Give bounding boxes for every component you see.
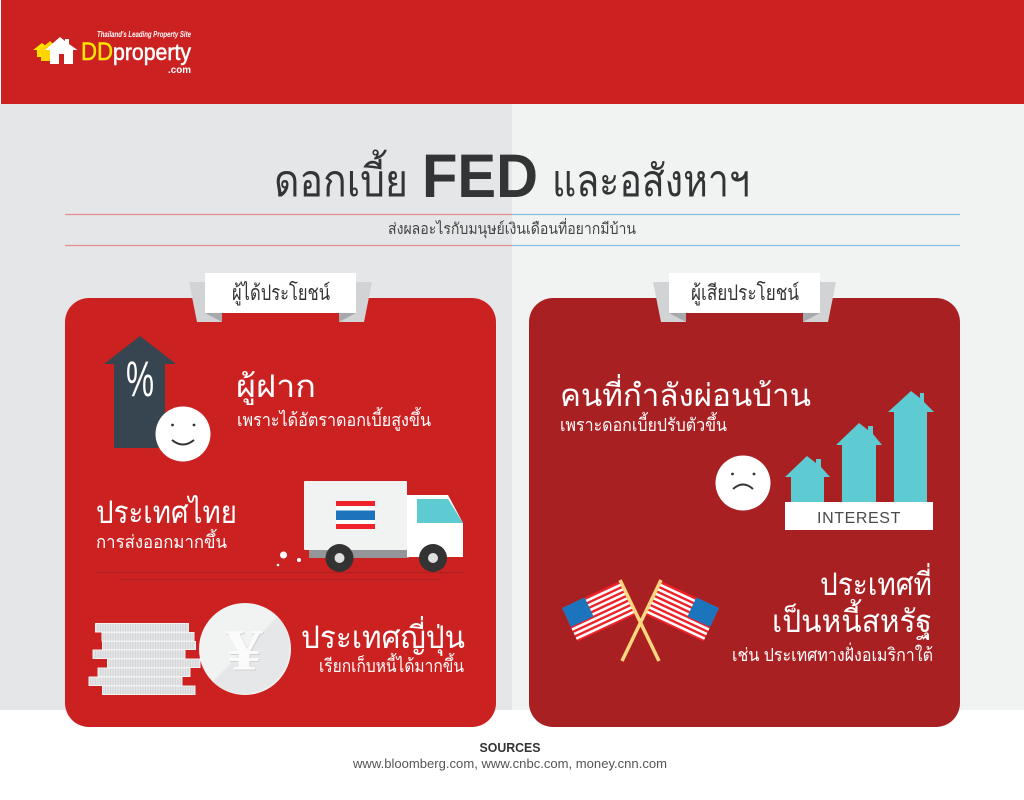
- panel: beneficiaries: [65, 273, 496, 727]
- sources: www.bloomberg.com, www.cnbc.com, money.cnn.com: [352, 756, 667, 771]
- flag: left: [562, 581, 636, 642]
- text: mortgage payers: เพราะดอกเบี้ยปรับตัวขึ้น: [560, 412, 727, 435]
- text: US debt holder countries: เป็นหนี้สหรัฐ: [772, 599, 932, 640]
- text: Japan: เรียกเก็บหนี้ได้มากขึ้น: [319, 653, 464, 676]
- text: US debt holder countries: เช่น ประเทศทางฝั่งอเมริกาใต้: [732, 642, 933, 665]
- icon: coin stack: [89, 624, 200, 694]
- icon: percent up arrow: [104, 336, 176, 448]
- text: Japan: ประเทศญี่ปุ่น: [301, 616, 465, 657]
- subtitle: ส่งผลอะไรกับมนุษย์เงินเดือนที่อยากมีบ้าน: [388, 218, 636, 239]
- text: depositors: [236, 369, 431, 431]
- icon: yen coin: ¥: [226, 618, 264, 684]
- ribbon: beneficiaries heading: ผู้ได้ประโยชน์: [232, 281, 330, 306]
- ribbon: losers heading: [653, 273, 836, 322]
- flag: right: [645, 581, 719, 642]
- logo: DDproperty: Thailand's Leading Property Site: [97, 30, 191, 39]
- logo: DDproperty: [33, 30, 191, 76]
- text: mortgage payers: คนที่กำลังผ่อนบ้าน: [560, 374, 811, 413]
- background: right half: [512, 104, 1024, 710]
- background: left half: [0, 104, 512, 710]
- text: depositors: เพราะได้อัตราดอกเบี้ยสูงขึ้น: [237, 407, 431, 431]
- sources: [352, 740, 667, 771]
- logo: DDproperty: DD: [81, 38, 113, 66]
- icon: percent up arrow: %: [126, 351, 154, 407]
- panel: losers: [529, 273, 960, 727]
- text: US debt holder countries: [732, 563, 933, 665]
- chart: rising interest houses: [785, 391, 934, 530]
- text: Thailand: ประเทศไทย: [96, 495, 237, 530]
- text: mortgage payers: [560, 374, 811, 435]
- sources: SOURCES: [480, 740, 541, 755]
- icon: yen coin: [199, 603, 291, 695]
- text: Thailand: การส่งออกมากขึ้น: [96, 529, 227, 552]
- ribbon: beneficiaries heading: [189, 273, 372, 322]
- logo: DDproperty: property: [113, 39, 191, 65]
- title rules: [65, 214, 960, 246]
- icon: yen coin: ¥: [225, 618, 263, 682]
- icon: sad face: [716, 456, 770, 510]
- title: FED: [422, 142, 538, 210]
- text: US debt holder countries: ประเทศที่: [820, 563, 932, 602]
- text: Thailand: [96, 495, 237, 552]
- title: [274, 142, 750, 210]
- icon: truck with Thai flag: [97, 481, 463, 580]
- icon: crossed US flags: [562, 580, 719, 661]
- title: และอสังหาฯ: [552, 157, 750, 206]
- icon: smiling face: [156, 406, 210, 462]
- header band: [1, 0, 1024, 104]
- title: ดอกเบี้ย: [274, 149, 408, 206]
- logo: DDproperty: .com: [168, 65, 191, 76]
- chart: rising interest houses: INTEREST: [817, 510, 901, 527]
- text: Japan: [301, 616, 465, 676]
- ribbon: losers heading: ผู้เสียประโยชน์: [691, 281, 799, 306]
- text: depositors: ผู้ฝาก: [236, 369, 316, 405]
